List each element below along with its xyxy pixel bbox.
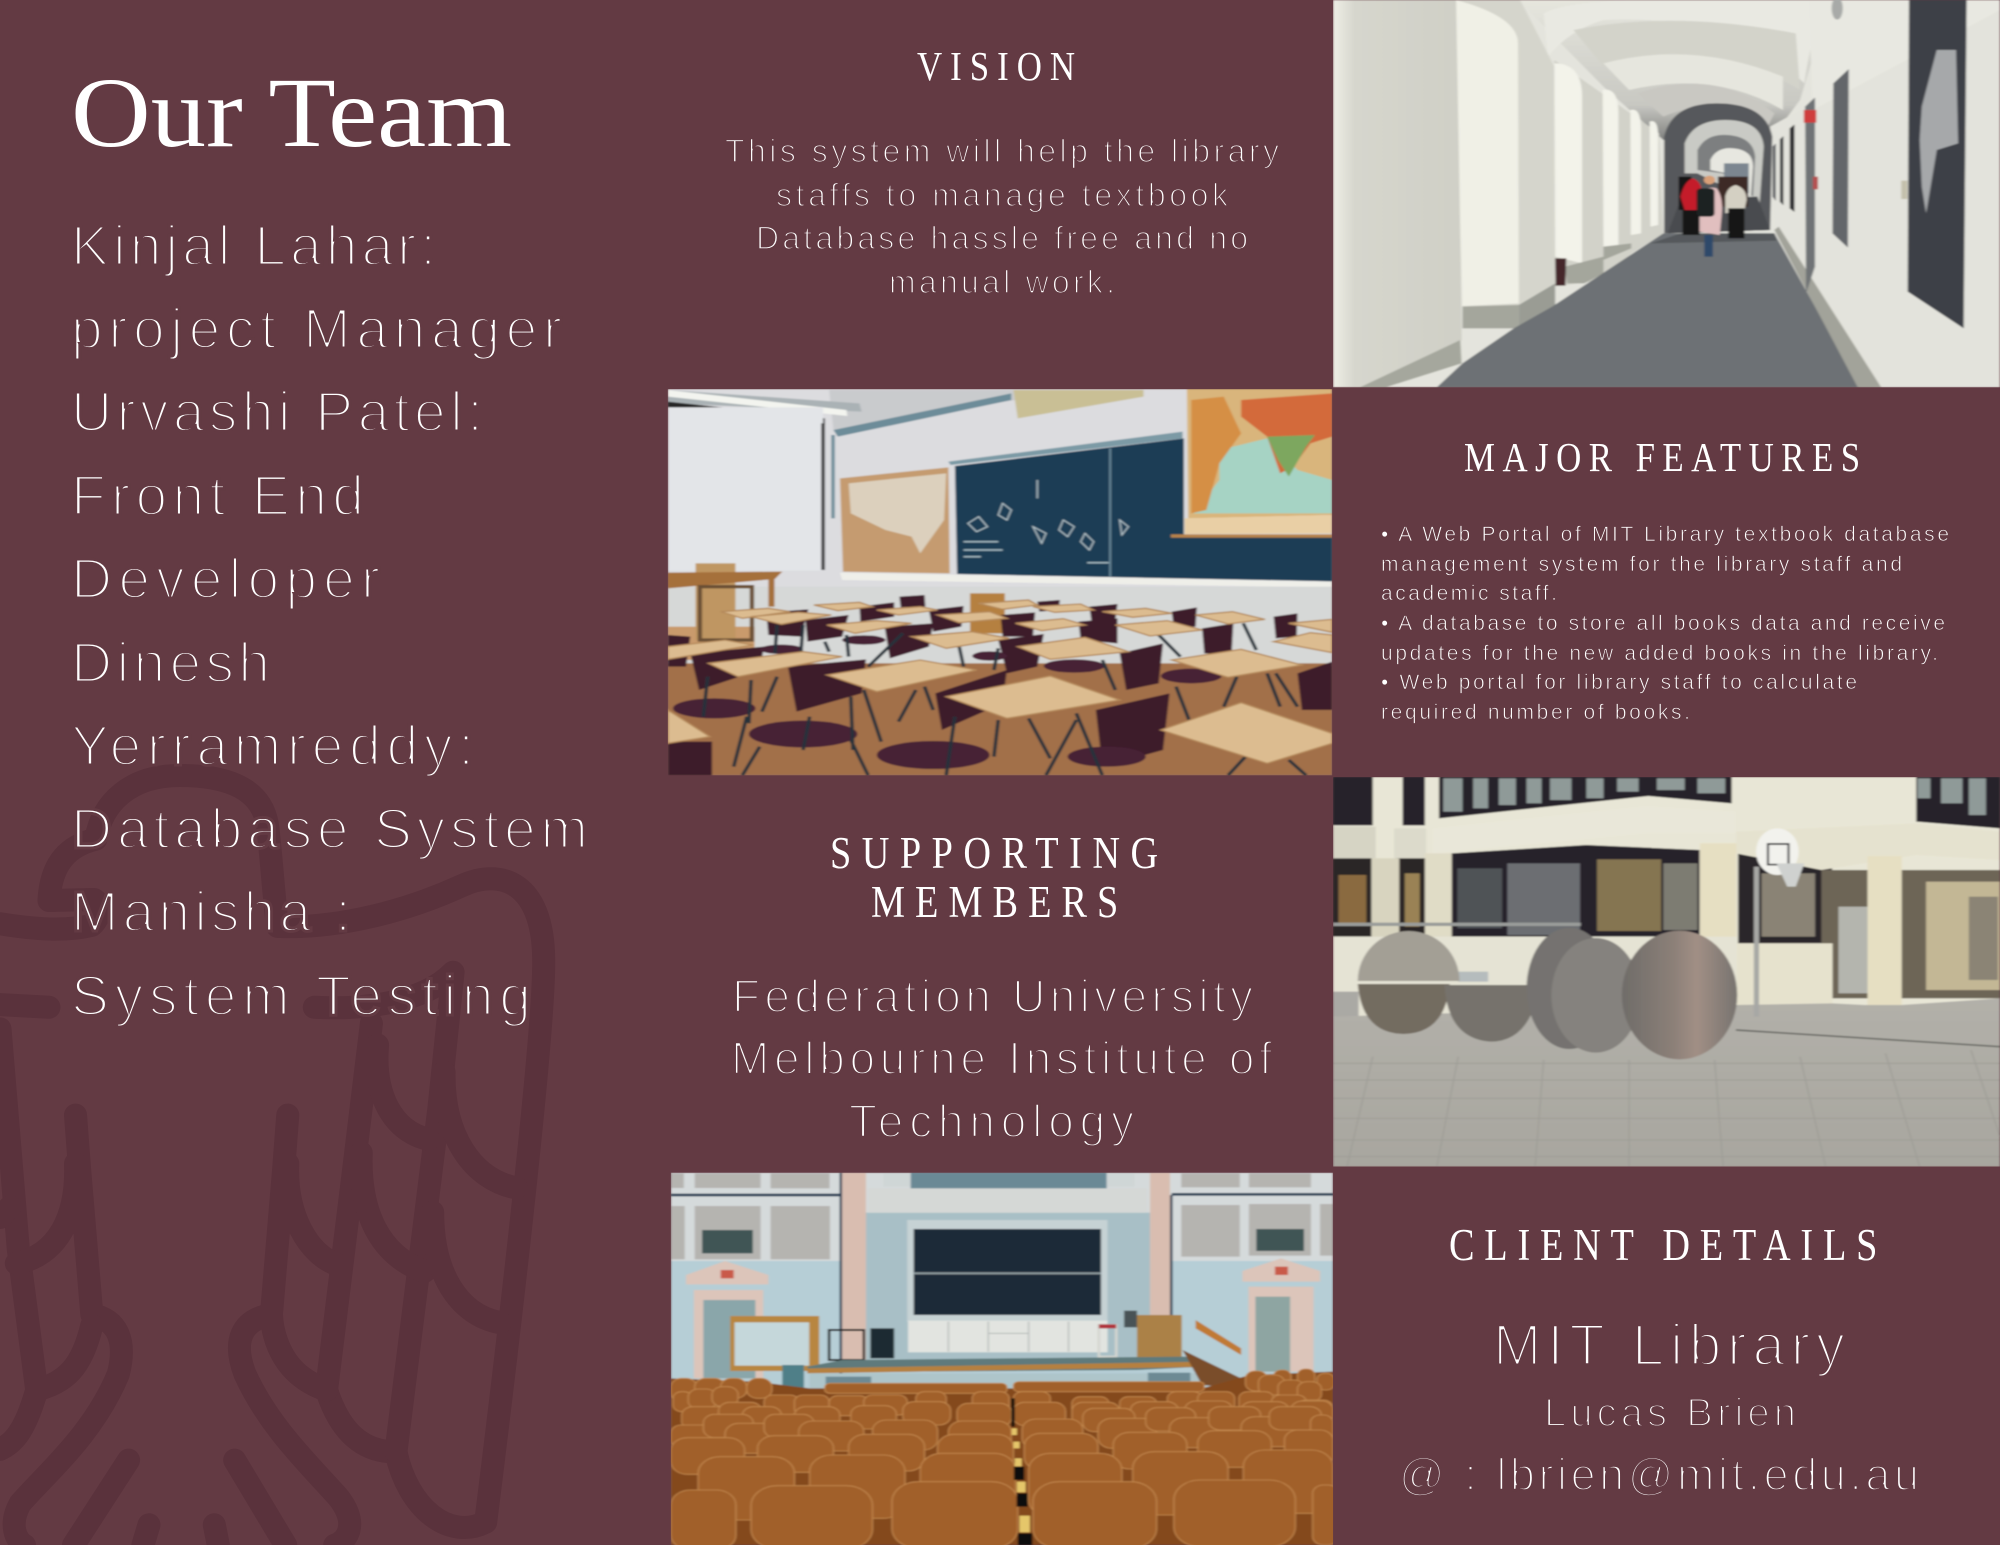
aisle arm rests bbox=[1012, 1428, 1030, 1532]
photo: building with spheres bbox=[1333, 777, 2000, 1167]
heading: client details: CLIENT DETAILS bbox=[1449, 1221, 1877, 1271]
text block: team members: Manisha : bbox=[71, 880, 351, 944]
wall panels bbox=[671, 1173, 1333, 1259]
desks group bbox=[668, 600, 1332, 763]
text block: vision: staffs to manage textbook bbox=[776, 177, 1229, 213]
photo: hallway bbox=[1333, 0, 2000, 387]
text block: major features: required number of books. bbox=[1381, 701, 1690, 724]
text block: team members: Kinjal Lahar: bbox=[71, 214, 436, 278]
photo: classroom bbox=[668, 389, 1332, 775]
desk and chair legs bbox=[703, 623, 1306, 775]
text block: supporting members bbox=[731, 970, 1272, 1147]
text block: major features: • Web portal for library staff to calculate bbox=[1381, 671, 1857, 694]
heading: supporting members: SUPPORTING bbox=[830, 829, 1158, 879]
seating block bbox=[671, 1372, 1333, 1545]
text block: client details: Lucas Brien bbox=[1544, 1391, 1796, 1435]
title: Our Team bbox=[71, 57, 512, 168]
text block: major features: academic staff. bbox=[1381, 582, 1557, 605]
text block: team members: Developer bbox=[71, 547, 380, 611]
text block: team members bbox=[71, 214, 588, 1028]
text block: supporting members: Technology bbox=[849, 1095, 1134, 1147]
chair backs group bbox=[668, 595, 1332, 775]
poster group bbox=[1773, 0, 1967, 328]
chair seats group bbox=[673, 635, 1222, 769]
heading: supporting members: MEMBERS bbox=[871, 878, 1118, 928]
text block: client details: @ : lbrien@mit.edu.au bbox=[1399, 1449, 1919, 1500]
heading: major features: MAJOR FEATURES bbox=[1464, 435, 1860, 481]
text block: team members: System Testing bbox=[71, 964, 531, 1028]
text block: major features: updates for the new added books in the library. bbox=[1381, 642, 1938, 665]
text block: major features: management system for the library staff and bbox=[1381, 553, 1902, 576]
text block: team members: Front End bbox=[71, 464, 364, 528]
text block: major features: • A Web Portal of MIT Library textbook database bbox=[1381, 523, 1949, 546]
paving bbox=[1333, 998, 2000, 1167]
upper windows bbox=[1333, 777, 2000, 828]
text block: client details bbox=[1399, 1313, 1919, 1500]
basketball hoop bbox=[1754, 867, 1759, 1017]
text block: team members: project Manager bbox=[71, 297, 562, 361]
doors bbox=[686, 1258, 1320, 1378]
text block: vision: Database hassle free and no bbox=[756, 220, 1248, 256]
text block: major features bbox=[1381, 523, 1949, 724]
heading: vision: VISION bbox=[917, 44, 1075, 90]
text block: team members: Urvashi Patel: bbox=[71, 380, 483, 444]
seat rows bbox=[671, 1369, 1339, 1545]
people group bbox=[1679, 176, 1748, 257]
text block: major features: • A database to store all books data and receive bbox=[1381, 612, 1945, 635]
text block: team members: Database System bbox=[71, 797, 588, 861]
heading: supporting members bbox=[830, 829, 1158, 928]
lower storey bbox=[1333, 858, 1371, 937]
text block: team members: Dinesh bbox=[71, 631, 270, 695]
text block: client details: MIT Library bbox=[1493, 1313, 1845, 1378]
whiteboard and furniture bbox=[730, 1316, 819, 1371]
text block: supporting members: Federation University bbox=[732, 970, 1253, 1022]
text block: supporting members: Melbourne Institute of bbox=[731, 1032, 1272, 1084]
text block: vision: This system will help the library bbox=[725, 133, 1279, 169]
photo: auditorium bbox=[671, 1173, 1339, 1545]
text block: vision bbox=[725, 133, 1279, 300]
text block: vision: manual work. bbox=[889, 264, 1115, 300]
watermark: eagle icon bbox=[0, 775, 544, 1545]
sculptures bbox=[1358, 931, 1459, 981]
text block: team members: Yerramreddy: bbox=[71, 714, 474, 778]
